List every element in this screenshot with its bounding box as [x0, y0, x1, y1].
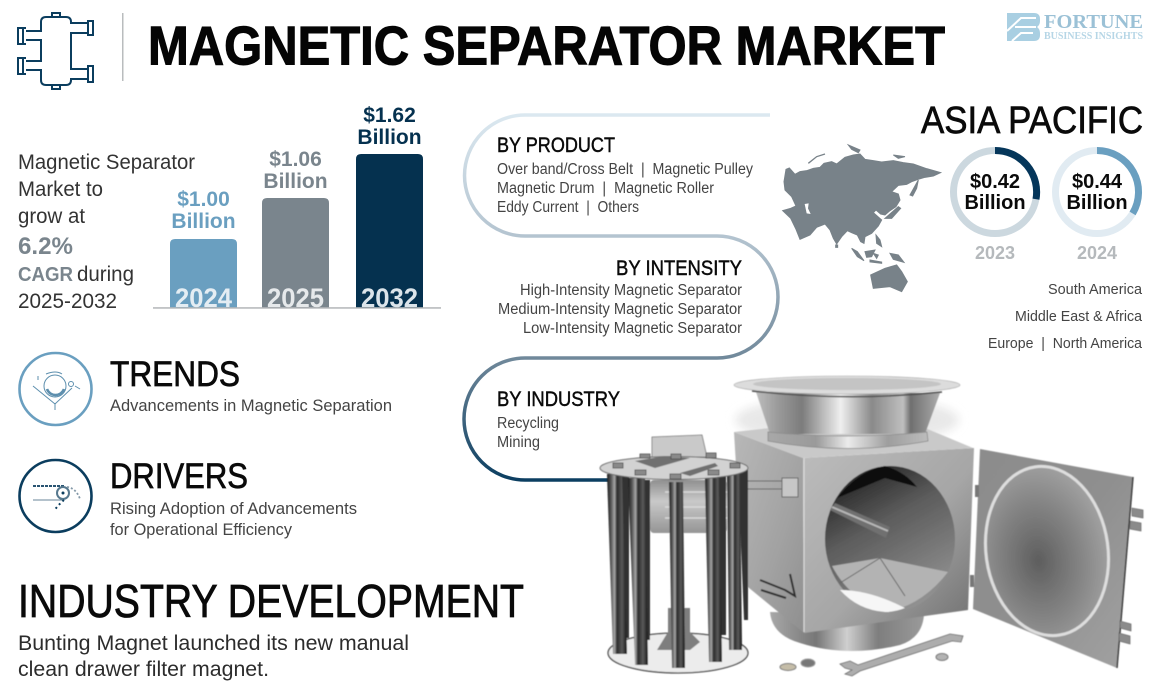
internal shaft: [830, 503, 890, 538]
growth statement: Market to: [18, 178, 103, 201]
trends block: [20, 353, 392, 425]
housing: [734, 376, 974, 651]
product photo: magnetic separator housing, door and cage: [600, 376, 1143, 676]
segment: by product: Magnetic Drum | Magnetic Roller: [497, 180, 714, 197]
segment: by industry: Mining: [497, 434, 540, 451]
regions list: South America: [1048, 281, 1143, 298]
cage: [600, 435, 748, 673]
segment: by intensity: Low-Intensity Magnetic Separator: [523, 320, 742, 337]
bar 2025: [262, 148, 329, 313]
segment: by intensity: BY INTENSITY: [616, 257, 742, 280]
regions list: [988, 281, 1143, 352]
wrench and washers: [780, 634, 963, 676]
title: MAGNETIC SEPARATOR MARKET: [148, 14, 945, 76]
header icon: separator pipes: [18, 13, 93, 89]
industry development: [18, 575, 524, 681]
back rods: [620, 470, 748, 640]
segment: by industry: BY INDUSTRY: [497, 388, 620, 411]
growth statement: grow at: [18, 205, 85, 228]
logo: Fortune Business Insights: [1007, 11, 1143, 42]
growth statement: [18, 151, 195, 313]
growth statement: 6.2%: [18, 233, 73, 260]
bar chart: market size: [153, 104, 441, 313]
magnet tube: [650, 480, 727, 533]
header divider: [122, 13, 124, 81]
cast shadow: [735, 396, 959, 444]
growth statement: Magnetic Separator: [18, 151, 195, 174]
bar 2032: $1.62: [363, 104, 416, 127]
growth statement: 2025-2032: [18, 290, 117, 313]
donut 2024: 2024: [1077, 243, 1117, 263]
latch bottom: [760, 574, 795, 598]
growth statement: during: [77, 263, 134, 286]
bar 2025: 2025: [267, 283, 324, 313]
heading: asia pacific: ASIA PACIFIC: [921, 100, 1143, 142]
segment: by product: BY PRODUCT: [497, 134, 615, 157]
opening: [825, 466, 955, 612]
bar 2025: Billion: [263, 170, 328, 193]
segment: by industry: [497, 388, 620, 451]
bar 2024: 2024: [175, 283, 232, 313]
door: [970, 449, 1143, 668]
segment: by intensity: Medium-Intensity Magnetic Separator: [498, 301, 742, 318]
donut 2023: [954, 150, 1037, 263]
donut 2023: 2023: [975, 243, 1015, 263]
drivers text: for Operational Efficiency: [110, 521, 293, 539]
side panel: [734, 432, 804, 633]
heading: trends: TRENDS: [110, 355, 240, 394]
donut 2024: $0.44: [1072, 171, 1123, 193]
drivers text: [110, 500, 357, 539]
rods: [607, 474, 627, 654]
growth statement: CAGR: [18, 264, 74, 286]
segment: by intensity: [498, 257, 742, 337]
drivers block: [20, 457, 357, 539]
segment: by industry: Recycling: [497, 415, 559, 432]
top face: [734, 428, 973, 458]
top box: [652, 435, 707, 457]
bar 2032: Billion: [357, 126, 422, 149]
bar 2024: [170, 188, 237, 313]
top disc: [600, 456, 748, 480]
drivers text: Rising Adoption of Advancements: [110, 500, 357, 518]
bar 2024: $1.00: [177, 188, 230, 211]
bar 2032: 2032: [361, 283, 418, 313]
segmentation ribbon: [464, 115, 778, 480]
donut 2023: $0.42: [970, 171, 1020, 193]
map: asia pacific: [783, 145, 941, 292]
segment: by product: Eddy Current | Others: [497, 199, 639, 216]
development text: clean drawer filter magnet.: [18, 658, 269, 681]
segment: by product: Over band/Cross Belt | Magnetic Pulley: [497, 161, 753, 178]
donut 2023: Billion: [964, 192, 1026, 214]
latch top: [745, 478, 798, 497]
segment: by intensity: High-Intensity Magnetic Separator: [520, 282, 742, 299]
donut 2024: Billion: [1066, 192, 1128, 214]
development text: Bunting Magnet launched its new manual: [18, 632, 409, 655]
icon: magnetic drum: [20, 353, 92, 425]
heading: drivers: DRIVERS: [110, 457, 248, 496]
development text: [18, 632, 409, 681]
heading: industry development: INDUSTRY DEVELOPMENT: [18, 575, 524, 627]
bar 2024: Billion: [171, 210, 236, 233]
icon: conveyor: [20, 460, 92, 532]
logo: Fortune Business Insights: BUSINESS INSIGHTS: [1044, 31, 1143, 42]
donut 2024: [1056, 150, 1139, 263]
bottom disc: [608, 633, 748, 673]
trends text: Advancements in Magnetic Separation: [110, 397, 392, 415]
regions list: Middle East & Africa: [1015, 308, 1143, 325]
base flange: [770, 612, 924, 651]
regions list: Europe | North America: [988, 335, 1143, 352]
cone: [756, 392, 940, 434]
segment: by product: [497, 134, 753, 216]
bar 2025: $1.06: [269, 148, 322, 171]
bar 2032: [356, 104, 423, 313]
flange top: [734, 376, 960, 394]
logo: Fortune Business Insights: FORTUNE: [1044, 11, 1143, 33]
front panel: [803, 448, 974, 633]
